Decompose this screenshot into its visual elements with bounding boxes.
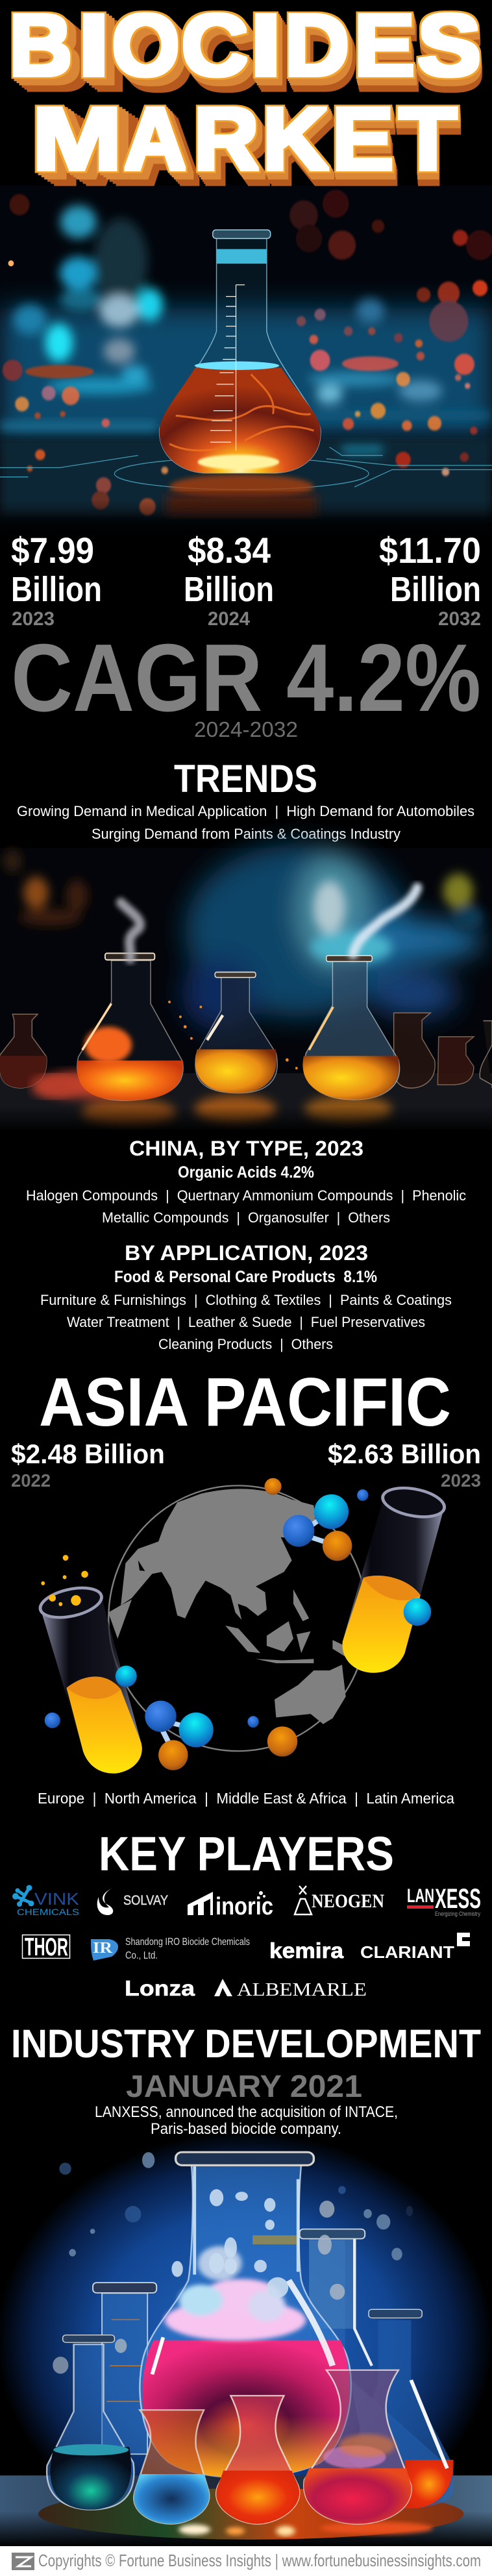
logo: Shandong IRO: IR bbox=[93, 1940, 113, 1957]
section: China by type: Organic Acids 4.2% bbox=[178, 1163, 314, 1182]
stat: Asia Pacific 2023: 2023 bbox=[441, 1470, 481, 1491]
stat: 2024 market size bbox=[184, 530, 274, 630]
stat: 2023 market size: $7.99 bbox=[11, 530, 94, 571]
flask 1 bbox=[31, 953, 183, 1100]
logo: Neogen: NEOGEN bbox=[312, 1890, 384, 1912]
trends list: Surging Demand from Paints & Coatings Industry bbox=[92, 826, 400, 842]
stat: 2032 market size: $11.70 bbox=[379, 530, 481, 571]
right test tube bbox=[343, 1483, 447, 1673]
stat: 2024 market size: $8.34 bbox=[188, 530, 271, 571]
section: by application: Food & Personal Care Products 8.1% bbox=[114, 1268, 377, 1286]
footer logo bbox=[12, 2553, 34, 2570]
small blue flask bbox=[134, 2410, 209, 2524]
section: China by type: Metallic Compounds | Organosulfer | Others bbox=[102, 1209, 390, 1226]
stat: 2032 market size: 2032 bbox=[438, 608, 481, 630]
CAGR period: 2024-2032 bbox=[194, 717, 298, 741]
flask glass bbox=[160, 230, 321, 473]
stat: Asia Pacific 2022: 2022 bbox=[11, 1470, 51, 1491]
section: by application: Furniture & Furnishings | Clothing & Textiles | Paints & Coatings bbox=[40, 1292, 452, 1308]
logo: Kemira: kemira bbox=[269, 1938, 344, 1963]
development date: JANUARY 2021 bbox=[126, 2070, 362, 2104]
logo: Lanxess: LAN bbox=[407, 1885, 434, 1907]
logo: Albemarle: ALBEMARLE bbox=[237, 1979, 367, 2000]
trends list bbox=[17, 803, 474, 842]
other regions list: Europe | North America | Middle East & Africa | Latin America bbox=[38, 1790, 454, 1807]
section: China by type: Halogen Compounds | Quertnary Ammonium Compounds | Phenolic bbox=[26, 1187, 466, 1204]
logo: Shandong IRO: Co., Ltd. bbox=[125, 1950, 158, 1961]
logo: Vink Chemicals: CHEMICALS bbox=[17, 1907, 79, 1917]
stat: Asia Pacific 2022: $2.48 Billion bbox=[11, 1439, 165, 1469]
main flask bbox=[140, 2152, 351, 2477]
fade under flask image bbox=[0, 500, 492, 539]
development description: LANXESS, announced the acquisition of INTACE, bbox=[95, 2103, 398, 2121]
logo: Lanxess bbox=[407, 1883, 481, 1917]
section: by application: Water Treatment | Leather & Suede | Fuel Preservatives bbox=[67, 1314, 425, 1330]
section: China by type: CHINA, BY TYPE, 2023 bbox=[129, 1137, 363, 1160]
title: Market: A bbox=[124, 90, 186, 189]
yellow droplets bbox=[41, 1555, 88, 1606]
section: by application: Cleaning Products | Others bbox=[158, 1336, 333, 1352]
heading: key players: KEY PLAYERS bbox=[99, 1827, 394, 1881]
section: by application: BY APPLICATION, 2023 bbox=[125, 1241, 368, 1265]
section: China by type bbox=[26, 1137, 466, 1226]
stat: 2023 market size bbox=[11, 530, 102, 630]
tall right flask bbox=[300, 2229, 454, 2508]
logo: Solvay: SOLVAY bbox=[123, 1893, 168, 1908]
logo: Clariant bbox=[360, 1933, 470, 1962]
title: Market: T bbox=[399, 90, 457, 189]
smoke bbox=[121, 887, 417, 959]
logo: Clariant: CLARIANT bbox=[360, 1942, 454, 1962]
title: Market: K bbox=[262, 90, 328, 189]
stat: 2023 market size: Billion bbox=[11, 570, 102, 609]
section: by application bbox=[40, 1241, 452, 1352]
stat: 2024 market size: 2024 bbox=[208, 608, 250, 630]
heading: Asia Pacific: ASIA PACIFIC bbox=[39, 1364, 451, 1441]
logo: Neogen bbox=[295, 1886, 384, 1914]
logo: Thor: THOR bbox=[25, 1933, 68, 1961]
floating bubbles bbox=[53, 2152, 413, 2373]
logo: Vink Chemicals bbox=[12, 1885, 80, 1917]
stat: Asia Pacific 2023: $2.63 Billion bbox=[328, 1439, 481, 1469]
flask 2 bbox=[168, 972, 298, 1093]
disc bbox=[38, 2488, 463, 2540]
logo: Shandong IRO: Shandong IRO Biocide Chemicals bbox=[125, 1937, 250, 1948]
table bbox=[0, 1073, 492, 1130]
logo: Inoric bbox=[188, 1891, 273, 1920]
stat: 2032 market size bbox=[379, 530, 481, 630]
globe bbox=[108, 1485, 367, 1751]
flask 3 bbox=[302, 956, 400, 1100]
title: Biocides bbox=[9, 0, 482, 94]
image: three flasks with smoke bbox=[0, 845, 492, 1133]
left flask bbox=[47, 2335, 134, 2510]
heading: trends: TRENDS bbox=[174, 757, 317, 800]
logo: Thor bbox=[22, 1933, 70, 1961]
globe and test tubes illustration bbox=[37, 1478, 447, 1774]
development description: Paris-based biocide company. bbox=[151, 2120, 341, 2138]
left test tube bbox=[37, 1583, 142, 1774]
development description bbox=[95, 2103, 398, 2138]
side flasks bbox=[0, 1013, 492, 1088]
logo: Lonza: Lonza bbox=[125, 1976, 195, 2000]
pink flask bbox=[304, 2370, 412, 2524]
title: Market: R bbox=[193, 90, 259, 189]
title: Market bbox=[32, 90, 461, 189]
far right flask bbox=[349, 2309, 454, 2508]
footer bar bbox=[0, 2546, 492, 2576]
logo: Solvay bbox=[97, 1887, 168, 1915]
stat: 2024 market size: Billion bbox=[184, 570, 274, 609]
logo: Shandong IRO bbox=[91, 1937, 250, 1961]
stat: Asia Pacific 2022 bbox=[11, 1439, 165, 1491]
title: Market: M bbox=[32, 90, 122, 189]
image: colourful lab flasks bbox=[0, 2132, 492, 2548]
stat: 2023 market size: 2023 bbox=[12, 608, 55, 630]
orange flask bbox=[216, 2396, 299, 2524]
title: Market: E bbox=[332, 90, 394, 189]
tall left flask bbox=[93, 2283, 156, 2454]
logo: Inoric: inoric bbox=[215, 1893, 273, 1920]
stat: Asia Pacific 2023 bbox=[328, 1439, 481, 1491]
trends list: Growing Demand in Medical Application | High Demand for Automobiles bbox=[17, 803, 474, 819]
logo: Vink Chemicals: VINK bbox=[34, 1889, 80, 1909]
molecules bbox=[45, 1478, 431, 1770]
logo: Lanxess: Energizing Chemistry bbox=[435, 1911, 480, 1917]
image: flask with bokeh background bbox=[0, 186, 492, 537]
